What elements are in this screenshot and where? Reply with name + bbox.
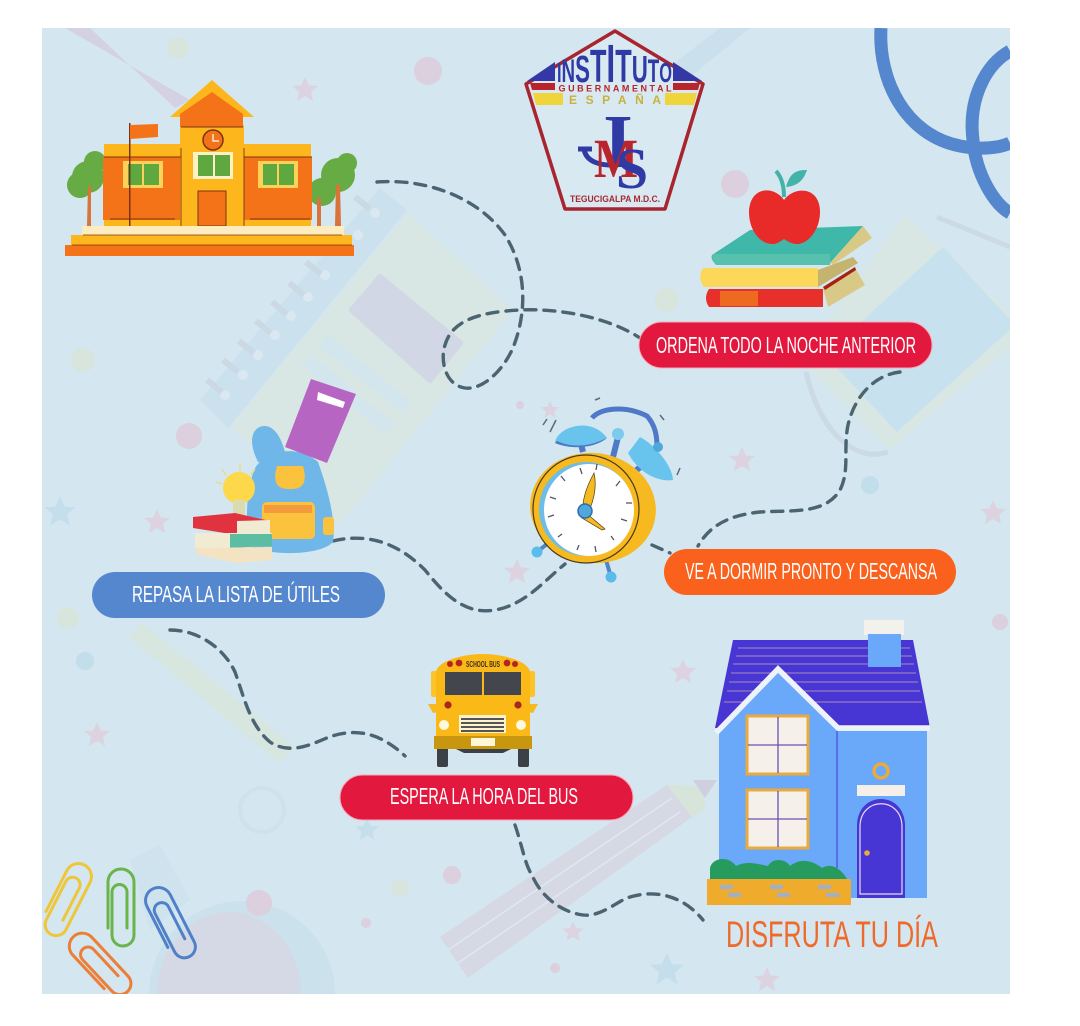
logo: Instituto Gubernamental España: ESPAÑA	[569, 92, 661, 107]
monogram: M	[594, 128, 638, 189]
monogram	[578, 100, 648, 201]
pill: ve a dormir pronto y descansa	[664, 549, 956, 595]
icon: alarm clock	[523, 398, 680, 582]
decoration: blue rings	[881, 28, 1010, 213]
heading: disfruta tu dia: DISFRUTA TU DÍA	[726, 914, 938, 955]
ruler	[129, 623, 295, 763]
icon: apple on books	[700, 170, 872, 307]
pill: ordena todo la noche anterior: ORDENA TODO LA NOCHE ANTERIOR	[656, 332, 916, 358]
pill: espera la hora del bus: ESPERA LA HORA DEL BUS	[390, 783, 578, 809]
dashed route lines	[170, 182, 900, 920]
bottom flask	[130, 845, 190, 930]
icon: school bus	[428, 654, 538, 767]
pill: repasa la lista de utiles: REPASA LA LISTA DE ÚTILES	[132, 581, 340, 607]
monogram: S	[616, 136, 648, 201]
icon: school	[65, 80, 357, 256]
notebook right	[800, 215, 1012, 450]
pill: repasa la lista de utiles	[92, 572, 385, 618]
icon: school bus: SCHOOL BUS	[466, 660, 500, 669]
pill: espera la hora del bus	[340, 775, 633, 820]
pencil	[440, 785, 692, 978]
top corner shapes	[65, 28, 190, 108]
logo: Instituto Gubernamental España: GUBERNAMENTAL	[558, 84, 672, 94]
logo: Instituto Gubernamental España	[526, 31, 703, 209]
icon: house	[707, 620, 930, 905]
logo: Instituto Gubernamental España: TEGUCIGALPA M.D.C.	[570, 194, 660, 204]
notebook left	[200, 188, 513, 525]
icon: paper clips	[44, 862, 197, 994]
pill: ordena todo la noche anterior	[639, 322, 932, 368]
monogram: I	[603, 100, 633, 184]
icon: backpack, notebook, bulb and books	[193, 379, 356, 563]
logo: Instituto Gubernamental España: INSTITUTO	[557, 34, 672, 94]
